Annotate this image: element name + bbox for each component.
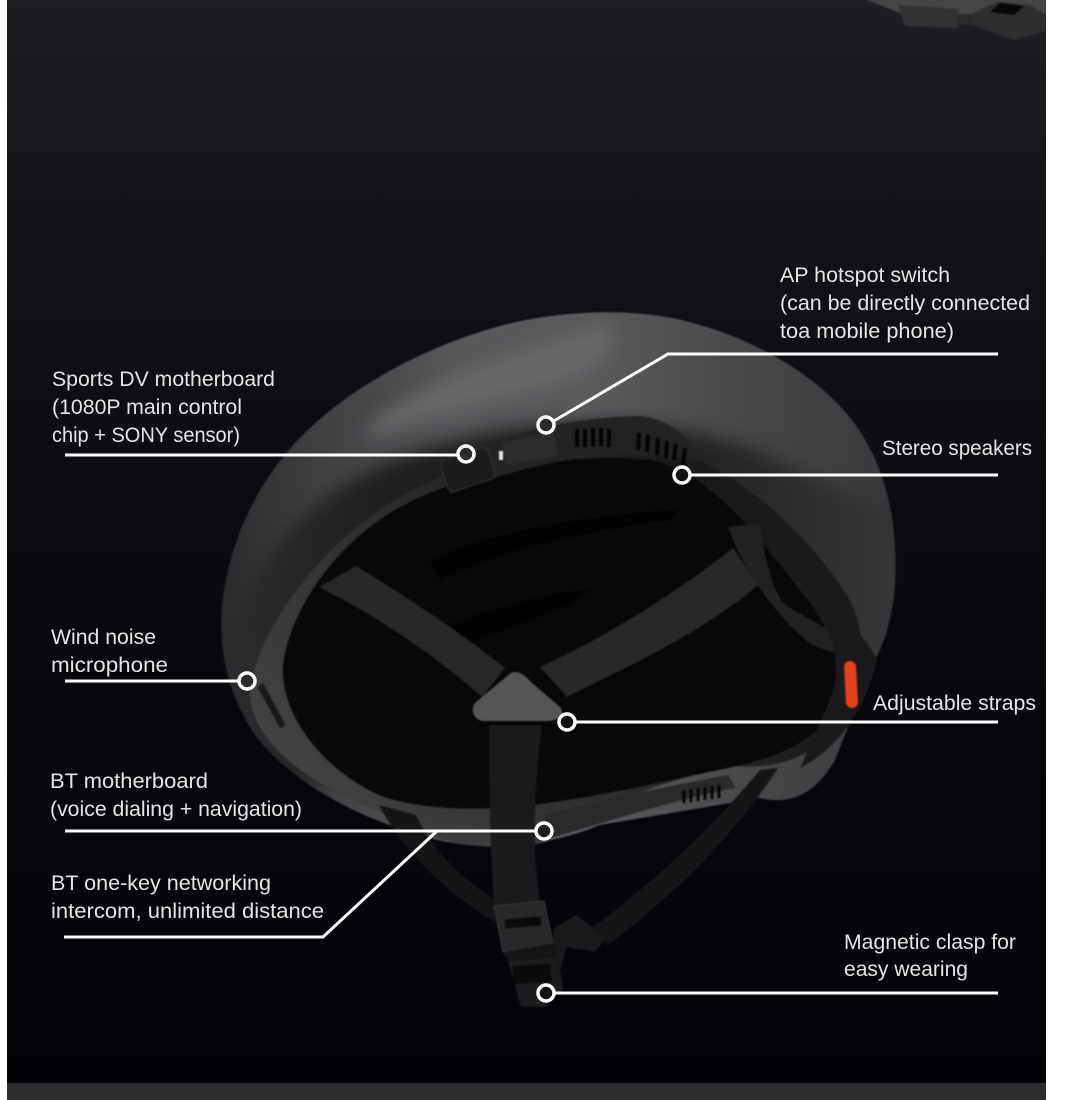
callout: AP hotspot switch: AP hotspot switch [780,264,950,287]
callout: Wind noise microphone: Wind noise [51,626,156,649]
right strap [540,548,758,697]
triangular strap junction [473,672,562,721]
top electronics strip [441,416,698,494]
callout: Adjustable straps [559,692,1036,730]
inner rim [250,442,862,832]
callout: Magnetic clasp [538,931,1016,1001]
callout: BT one-key networking: BT one-key networking [51,872,271,895]
lower vents [684,785,719,803]
sensor panel [439,446,497,493]
callout: AP hotspot switch: toa mobile phone) [780,320,954,343]
helmet illustration [210,312,910,1007]
callout: Magnetic clasp: Magnetic clasp for [844,931,1016,954]
callout: BT motherboard [50,770,552,839]
callout: AP hotspot switch [538,264,1030,433]
left rear strap [379,805,495,922]
callout: Stereo speakers [674,437,1032,483]
dark lower shell band [250,412,873,790]
callout: BT motherboard: (voice dialing + navigation) [50,798,302,821]
speaker vents [577,428,685,465]
interior vents [430,510,680,645]
callout: BT one-key networking [51,831,437,937]
lower electronics strip [544,775,736,838]
right side strap bracket [728,524,840,655]
callout: Sports DV motherboard: (1080P main control [52,396,242,419]
callout: Sports DV motherboard [52,368,474,462]
left strap [319,566,505,697]
callout: Stereo speakers: Stereo speakers [882,437,1032,460]
lower lip highlight [400,808,548,847]
callout: BT motherboard: BT motherboard [50,770,208,793]
icon: buckle [494,901,606,1007]
shell soft shading [250,332,873,790]
callout: Magnetic clasp: easy wearing [844,958,968,981]
left microphone grille [257,682,286,729]
right rear strap [592,768,778,945]
helmet outer shell [221,312,896,846]
helmet interior padding [283,458,838,809]
callout: Sports DV motherboard: Sports DV motherboard [52,368,275,391]
vertical strap [489,725,542,905]
rear strap [795,575,877,768]
callout: Wind noise microphone [51,626,255,689]
bottom strip [7,1083,1046,1100]
callout: Adjustable straps: Adjustable straps [873,692,1036,715]
callout: Wind noise microphone: microphone [51,654,168,677]
small status light [499,451,503,460]
icon: top-right buckle fragment [867,0,1046,40]
callout: Sports DV motherboard: chip + SONY sensor) [52,424,240,447]
button panel [502,433,558,465]
callout: BT one-key networking: intercom, unlimited distance [51,900,324,923]
light upper shell area [370,325,613,440]
callout: AP hotspot switch: (can be directly connected [780,292,1030,315]
icon: red tail light [844,661,858,708]
